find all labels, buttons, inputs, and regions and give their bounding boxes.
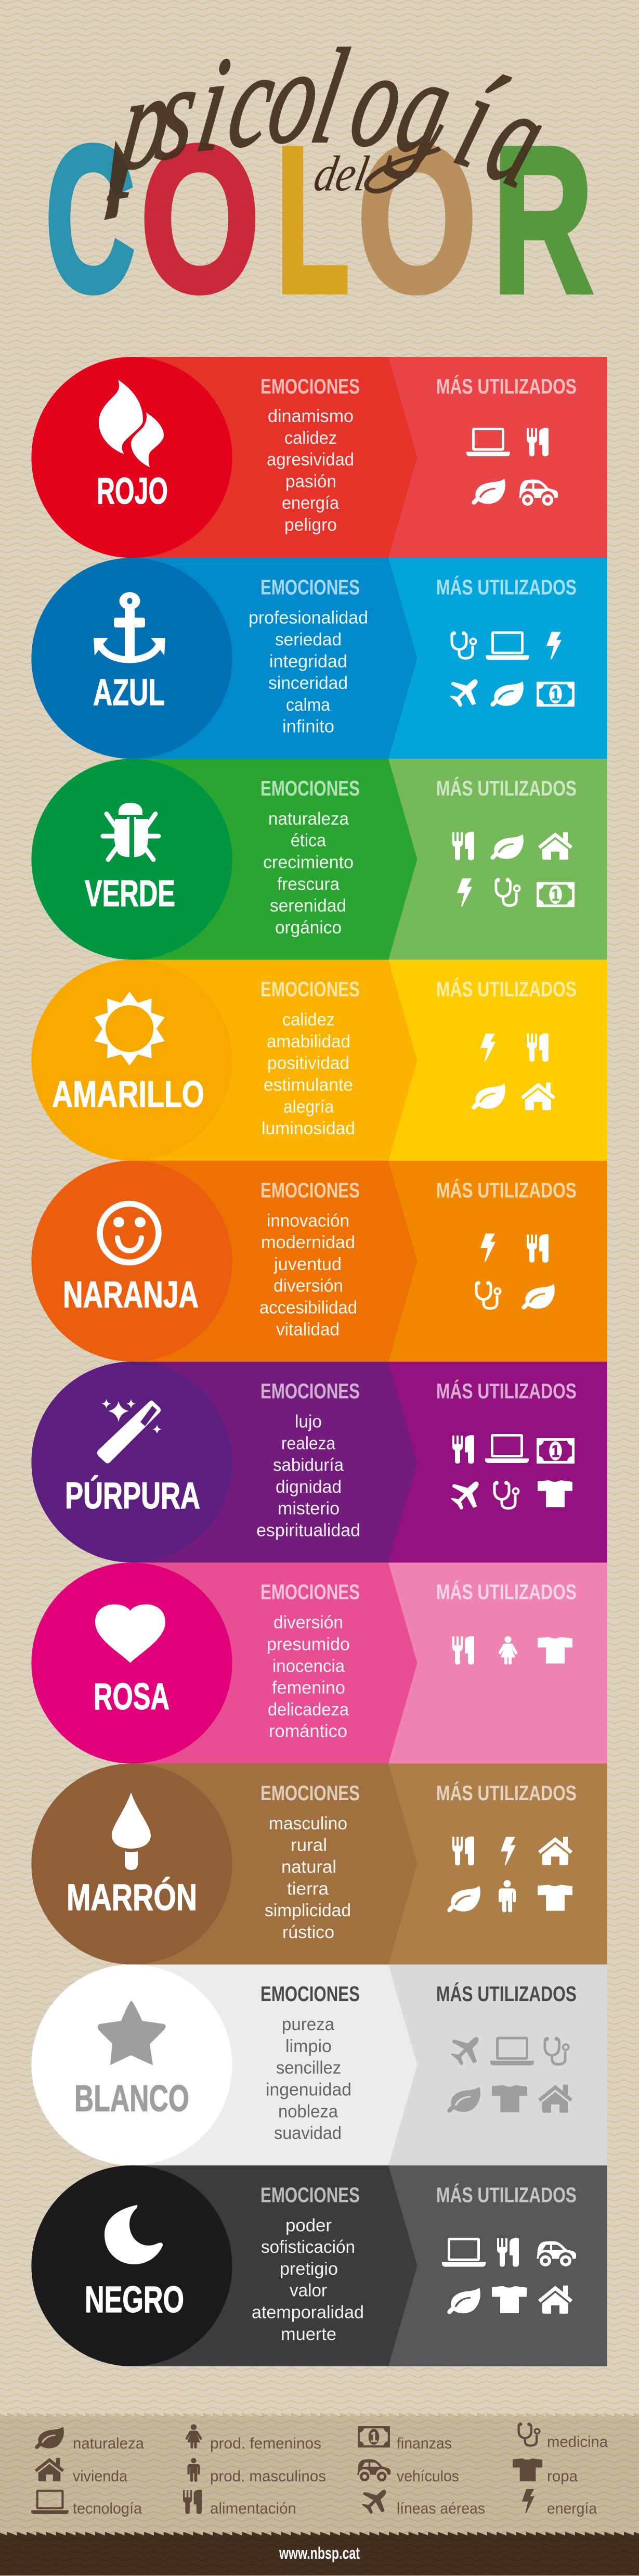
panel: rosa xyxy=(31,1562,607,1764)
emotions list: masculino xyxy=(269,1814,347,1834)
emotions list: amabilidad xyxy=(267,1032,350,1052)
legend: vehiculos: vehículos xyxy=(397,2468,459,2485)
emotions list: natural xyxy=(281,1857,336,1877)
heading: emociones: EMOCIONES xyxy=(260,1379,360,1403)
emotions list xyxy=(265,1814,351,1942)
usage icons xyxy=(472,1033,554,1110)
panel: marron xyxy=(31,1763,607,1965)
emotions list: modernidad xyxy=(261,1233,355,1252)
title word: COLOR: O xyxy=(140,104,259,335)
legend: tecnologia: tecnología xyxy=(73,2500,142,2517)
emotions list: pureza xyxy=(282,2015,334,2034)
usage icons xyxy=(476,1234,555,1310)
emotions list xyxy=(256,1412,360,1540)
heading: emociones: EMOCIONES xyxy=(260,977,360,1001)
heading: mas utilizados: MÁS UTILIZADOS xyxy=(436,1781,577,1805)
emotions list: innovación xyxy=(267,1211,349,1231)
emotions list: naturaleza xyxy=(268,809,349,829)
color name: BLANCO xyxy=(74,2079,189,2120)
color name: AMARILLO xyxy=(52,1074,204,1116)
icon: moon xyxy=(105,2205,163,2264)
title word: COLOR: R xyxy=(493,104,593,336)
emotions list: valor xyxy=(290,2281,327,2301)
emotions list: romántico xyxy=(269,1722,347,1741)
emotions list: presumido xyxy=(267,1634,350,1654)
icon: flame xyxy=(99,380,164,467)
legend: vivienda: vivienda xyxy=(73,2468,127,2485)
emotions list: poder xyxy=(285,2215,332,2235)
emotions list xyxy=(267,406,354,535)
legend band xyxy=(0,2413,639,2536)
emotions list: pasión xyxy=(285,471,336,491)
color name: ROSA xyxy=(94,1676,169,1718)
heading: emociones: EMOCIONES xyxy=(260,575,360,599)
title word: del: del xyxy=(310,146,373,201)
emotions list: sofisticación xyxy=(261,2237,355,2257)
title xyxy=(45,21,593,336)
emotions list: infinito xyxy=(282,717,334,737)
color name: ROJO xyxy=(97,471,168,512)
icon: bug xyxy=(103,803,159,860)
emotions list: vitalidad xyxy=(276,1319,340,1339)
legend: vivienda xyxy=(36,2458,127,2485)
heading: mas utilizados: MÁS UTILIZADOS xyxy=(436,977,577,1001)
background: purpura xyxy=(31,1362,607,1563)
legend: alimentacion: alimentación xyxy=(210,2500,296,2517)
title word: COLOR xyxy=(45,103,593,336)
usage icons xyxy=(451,1434,575,1509)
emotions list: misterio xyxy=(278,1499,340,1519)
emotions list xyxy=(252,2215,364,2344)
icon: heart xyxy=(95,1605,165,1663)
heading: emociones: EMOCIONES xyxy=(260,776,360,800)
legend: naturaleza xyxy=(35,2427,144,2452)
emotions list: sinceridad xyxy=(268,673,348,693)
footer url: www.nbsp.cat xyxy=(279,2544,360,2562)
usage icons xyxy=(466,428,558,506)
emotions list: juventud xyxy=(273,1254,342,1274)
legend: prod. femeninos: prod. femeninos xyxy=(210,2435,321,2452)
legend: lineas aereas: líneas aéreas xyxy=(397,2500,485,2517)
color name: NARANJA xyxy=(63,1274,199,1315)
legend: energia xyxy=(522,2489,597,2517)
background: amarillo xyxy=(31,960,607,1161)
legend: finanzas xyxy=(358,2426,452,2452)
emotions list: realeza xyxy=(281,1433,335,1453)
heading: mas utilizados: MÁS UTILIZADOS xyxy=(436,2183,577,2207)
heading: mas utilizados: MÁS UTILIZADOS xyxy=(436,375,577,399)
background: marron xyxy=(31,1763,607,1965)
heading: emociones: EMOCIONES xyxy=(260,1982,360,2006)
emotions list: serenidad xyxy=(270,896,346,916)
emotions list: simplicidad xyxy=(265,1901,351,1920)
icon: smiley xyxy=(100,1204,159,1262)
emotions list: delicadeza xyxy=(268,1700,349,1720)
emotions list: calidez xyxy=(282,1010,335,1030)
color name: VERDE xyxy=(85,873,175,914)
emotions list: dignidad xyxy=(276,1477,342,1497)
heading: emociones: EMOCIONES xyxy=(260,1178,360,1202)
background: rosa xyxy=(31,1562,607,1764)
title word: COLOR: C xyxy=(45,103,135,335)
heading: emociones: EMOCIONES xyxy=(260,1781,360,1805)
emotions list: diversión xyxy=(273,1276,343,1296)
heading: emociones: EMOCIONES xyxy=(260,1580,360,1604)
background: azul xyxy=(31,558,607,759)
emotions list: lujo xyxy=(295,1412,322,1432)
heading: emociones: EMOCIONES xyxy=(260,375,360,399)
emotions list xyxy=(263,809,354,938)
emotions list: crecimiento xyxy=(263,853,354,873)
emotions list: rústico xyxy=(282,1923,334,1942)
legend: ropa: ropa xyxy=(547,2468,578,2485)
emotions list: calma xyxy=(286,695,330,715)
legend: finanzas: finanzas xyxy=(397,2435,452,2452)
color name: NEGRO xyxy=(85,2279,184,2321)
usage icons xyxy=(442,2238,576,2314)
emotions list xyxy=(266,2015,351,2143)
background: negro xyxy=(31,2165,607,2366)
emotions list: tierra xyxy=(287,1879,329,1899)
color name: MARRÓN xyxy=(67,1877,197,1918)
emotions list: positividad xyxy=(267,1054,349,1073)
emotions list: pretigio xyxy=(280,2259,338,2279)
legend: vehiculos xyxy=(357,2459,459,2485)
emotions list: accesibilidad xyxy=(259,1298,357,1318)
emotions list: atemporalidad xyxy=(252,2302,364,2322)
legend background xyxy=(0,2413,639,2536)
emotions list: ingenuidad xyxy=(266,2080,351,2100)
panel: azul xyxy=(31,558,607,759)
heading: mas utilizados: MÁS UTILIZADOS xyxy=(436,776,577,800)
emotions list: muerte xyxy=(281,2324,336,2344)
footer background xyxy=(0,2532,639,2575)
heading: mas utilizados: MÁS UTILIZADOS xyxy=(436,575,577,599)
color name: AZUL xyxy=(93,672,165,713)
panel: purpura xyxy=(31,1362,607,1563)
icon: magic wand xyxy=(97,1399,162,1464)
title word: COLOR: O xyxy=(357,104,477,335)
emotions list: limpio xyxy=(285,2036,332,2056)
emotions list: sencillez xyxy=(276,2058,341,2078)
emotions list: nobleza xyxy=(278,2101,338,2121)
emotions list: integridad xyxy=(269,651,347,671)
emotions list: energía xyxy=(282,493,339,513)
usage icons xyxy=(452,1636,572,1664)
background: rojo xyxy=(31,357,607,558)
emotions list: estimulante xyxy=(264,1075,353,1095)
background: verde xyxy=(31,759,607,960)
background: naranja xyxy=(31,1161,607,1362)
emotions list: frescura xyxy=(277,874,340,894)
legend: energia: energía xyxy=(547,2500,597,2517)
panel: rojo xyxy=(31,357,607,558)
panel: blanco xyxy=(31,1965,607,2165)
emotions list: femenino xyxy=(272,1678,345,1698)
emotions list: alegría xyxy=(283,1097,334,1117)
emotions list: agresividad xyxy=(267,450,354,470)
footer band xyxy=(0,2532,639,2575)
legend: naturaleza: naturaleza xyxy=(73,2435,144,2452)
legend: ropa xyxy=(513,2458,578,2485)
emotions list: luminosidad xyxy=(262,1119,355,1138)
heading: mas utilizados: MÁS UTILIZADOS xyxy=(436,1379,577,1403)
color name: PÚRPURA xyxy=(65,1476,200,1517)
heading: mas utilizados: MÁS UTILIZADOS xyxy=(436,1178,577,1202)
heading: mas utilizados: MÁS UTILIZADOS xyxy=(436,1982,577,2006)
emotions list: calidez xyxy=(284,428,337,448)
legend: prod. masculinos xyxy=(187,2458,326,2485)
emotions list: suavidad xyxy=(274,2123,342,2143)
usage icons xyxy=(450,631,575,707)
heading: mas utilizados: MÁS UTILIZADOS xyxy=(436,1580,577,1604)
emotions list: diversión xyxy=(273,1613,343,1633)
usage icons xyxy=(447,2037,571,2113)
legend: prod. femeninos xyxy=(186,2424,321,2452)
usage icons xyxy=(447,1836,572,1912)
icon: tree xyxy=(112,1792,151,1870)
background: blanco xyxy=(31,1965,607,2165)
emotions list: orgánico xyxy=(275,918,342,938)
icon: anchor xyxy=(94,592,165,660)
usage icons xyxy=(452,831,575,907)
legend: alimentacion xyxy=(183,2490,296,2517)
panel: naranja xyxy=(31,1161,607,1362)
emotions list: sabiduría xyxy=(273,1455,344,1475)
emotions list xyxy=(267,1613,350,1741)
emotions list: seriedad xyxy=(275,630,342,649)
emotions list xyxy=(249,608,368,737)
legend: medicina: medicina xyxy=(547,2433,608,2451)
emotions list xyxy=(262,1010,355,1138)
legend: prod. masculinos: prod. masculinos xyxy=(210,2468,326,2485)
emotions list: profesionalidad xyxy=(249,608,368,628)
icon: star xyxy=(98,2001,165,2065)
panel: negro xyxy=(31,2165,607,2366)
panel: verde xyxy=(31,759,607,960)
emotions list: rural xyxy=(291,1836,327,1855)
emotions list: ética xyxy=(291,831,326,851)
emotions list: peligro xyxy=(284,515,337,535)
emotions list: dinamismo xyxy=(268,406,354,426)
legend: tecnologia xyxy=(31,2490,142,2517)
title word: COLOR: L xyxy=(276,104,349,335)
emotions list: inocencia xyxy=(272,1656,345,1676)
legend: medicina xyxy=(519,2423,608,2451)
legend: lineas aereas xyxy=(362,2490,485,2517)
panel: amarillo xyxy=(31,960,607,1161)
emotions list: espiritualidad xyxy=(256,1520,360,1540)
icon: sun xyxy=(94,992,165,1066)
heading: emociones: EMOCIONES xyxy=(260,2183,360,2207)
emotions list xyxy=(259,1211,357,1339)
title script: psicología: psicología xyxy=(93,21,577,218)
